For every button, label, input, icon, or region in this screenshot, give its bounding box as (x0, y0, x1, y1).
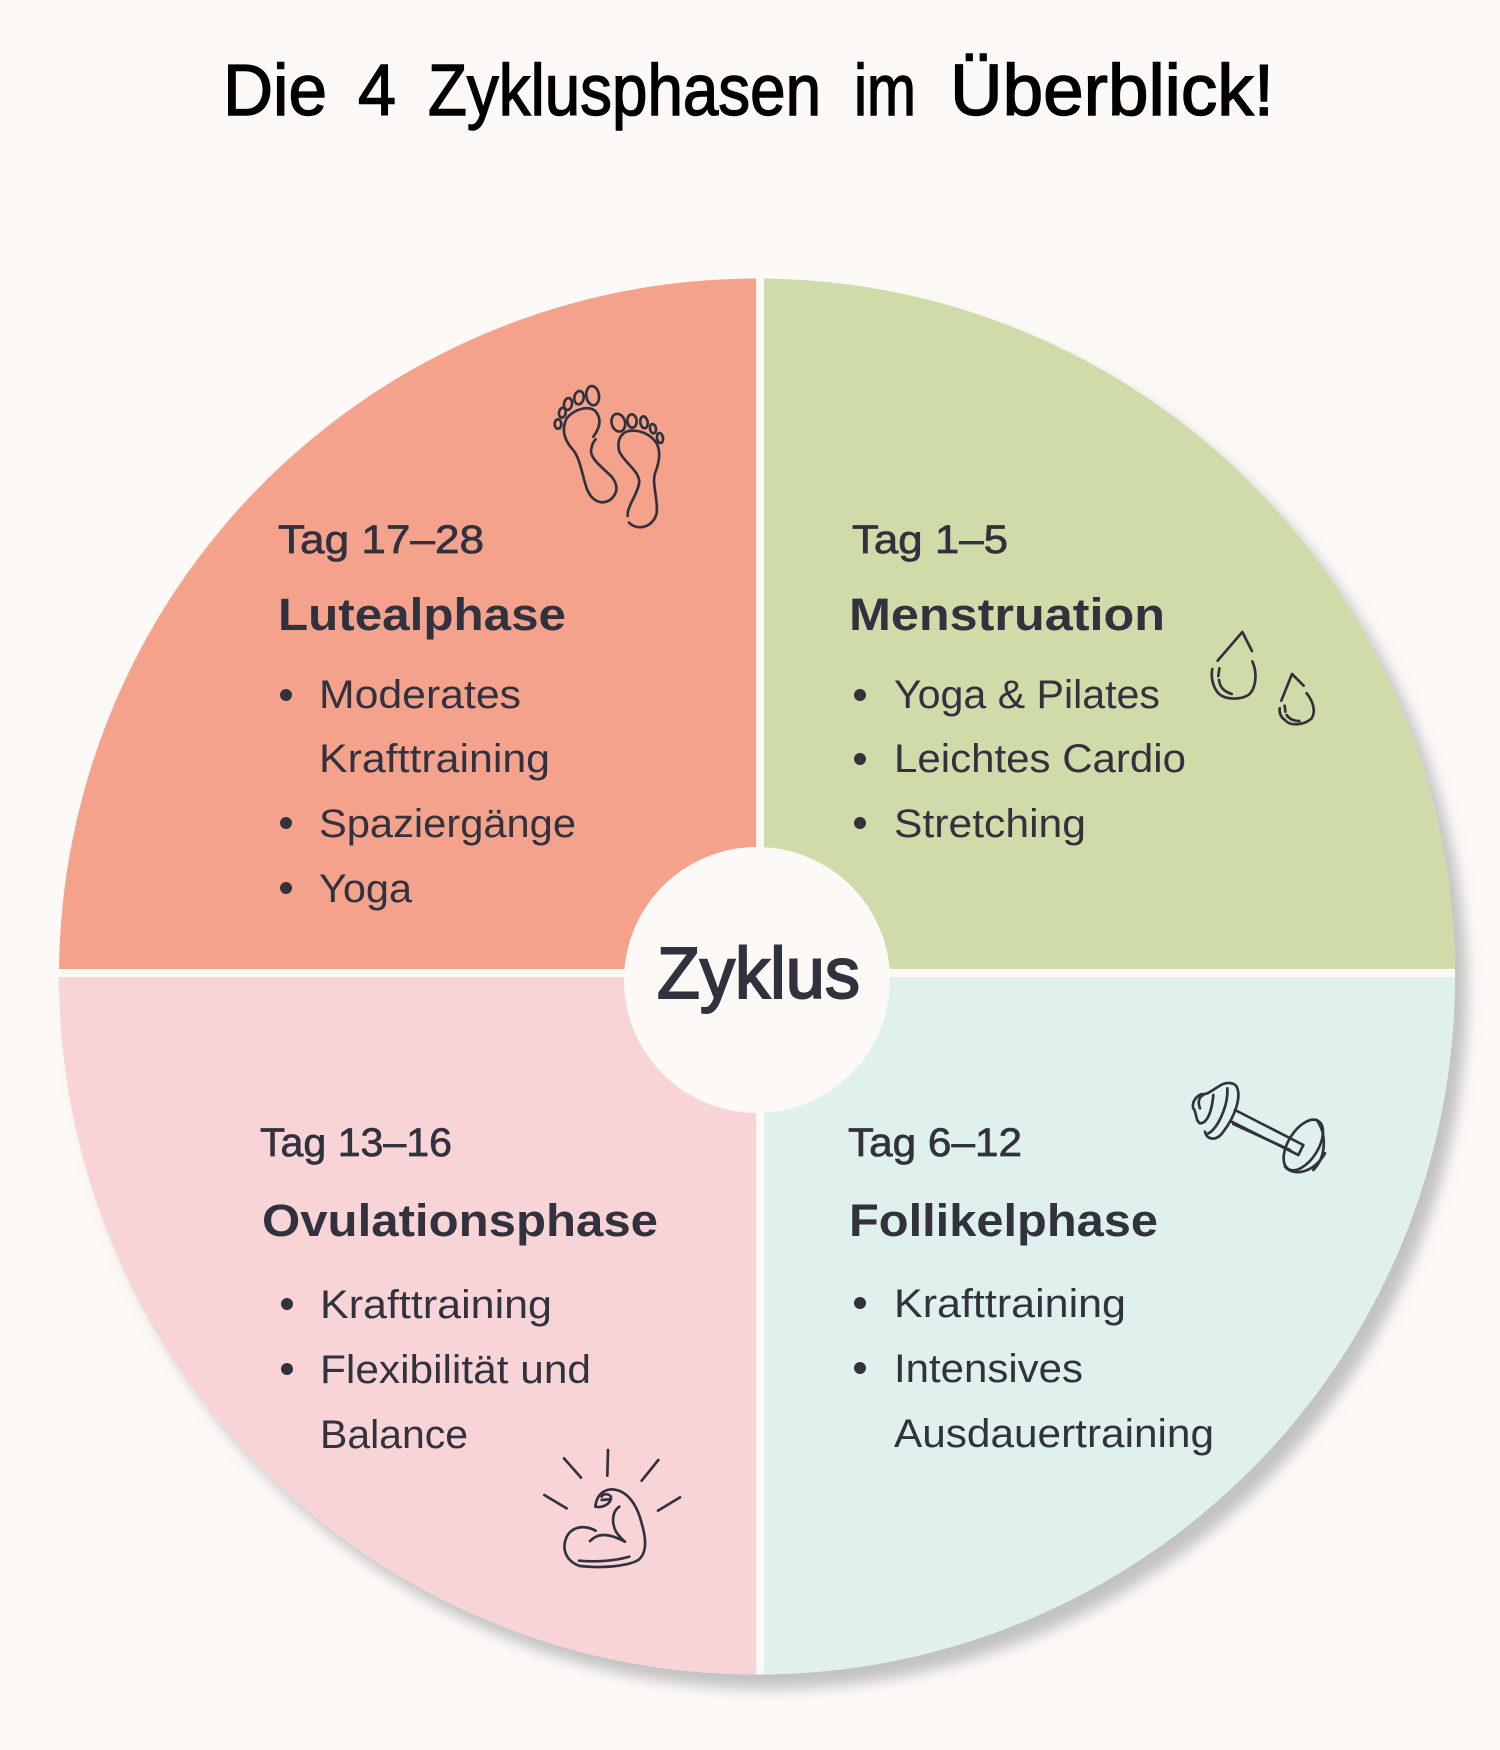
title: Zyklusphasen (428, 51, 821, 131)
text block: Follikelphase (848, 1121, 1214, 1456)
list: Follikelphase: Krafttraining (894, 1282, 1126, 1326)
icon: dumbbell (1193, 1083, 1331, 1177)
text block: Ovulationsphase (260, 1121, 658, 1457)
panel: Follikelphase (764, 977, 1474, 1687)
list: Lutealphase: Krafttraining (319, 737, 550, 781)
icon: flexed arm (544, 1450, 680, 1567)
list: Follikelphase (854, 1282, 1214, 1456)
center circle (624, 847, 890, 1113)
list: Menstruation: Stretching (894, 802, 1086, 846)
title: 4 (358, 51, 396, 131)
title: Überblick! (950, 51, 1274, 131)
panel: Lutealphase (40, 260, 756, 969)
list: Lutealphase: Yoga (319, 867, 413, 911)
heading: Menstruation: Menstruation (849, 589, 1165, 640)
list: Lutealphase: Spaziergänge (319, 802, 576, 846)
day range: Ovulationsphase: Tag 13–16 (260, 1121, 452, 1165)
list: Ovulationsphase: Balance (320, 1413, 468, 1457)
heading: Follikelphase: Follikelphase (849, 1195, 1158, 1246)
heading: Lutealphase: Lutealphase (278, 589, 566, 640)
heading: Ovulationsphase: Ovulationsphase (262, 1195, 658, 1246)
day range: Lutealphase: Tag 17–28 (278, 518, 484, 562)
icon: water drops (1212, 632, 1314, 724)
circle shadow (71, 293, 1467, 1689)
day range: Menstruation: Tag 1–5 (852, 518, 1008, 562)
list: Ovulationsphase: Flexibilität und (320, 1348, 591, 1392)
text block: Menstruation (849, 518, 1186, 846)
title (223, 51, 1274, 131)
center label: Zyklus (657, 934, 860, 1014)
title: im (854, 51, 916, 131)
list: Menstruation: Leichtes Cardio (894, 737, 1186, 781)
list: Menstruation (854, 673, 1186, 846)
cycle wheel (40, 260, 1474, 1690)
list: Follikelphase: Intensives (894, 1347, 1083, 1391)
text block: Lutealphase (278, 518, 576, 911)
title: Die (223, 51, 327, 131)
list: Follikelphase: Ausdauertraining (894, 1412, 1214, 1456)
list: Ovulationsphase: Krafttraining (320, 1283, 552, 1327)
list: Lutealphase (280, 673, 576, 911)
panel: Menstruation (764, 260, 1474, 969)
day range: Follikelphase: Tag 6–12 (848, 1121, 1022, 1165)
list: Menstruation: Yoga & Pilates (894, 673, 1160, 717)
list: Ovulationsphase (281, 1283, 591, 1457)
list: Lutealphase: Moderates (319, 673, 521, 717)
icon: footprints (555, 385, 664, 527)
panel: Ovulationsphase (40, 977, 756, 1687)
